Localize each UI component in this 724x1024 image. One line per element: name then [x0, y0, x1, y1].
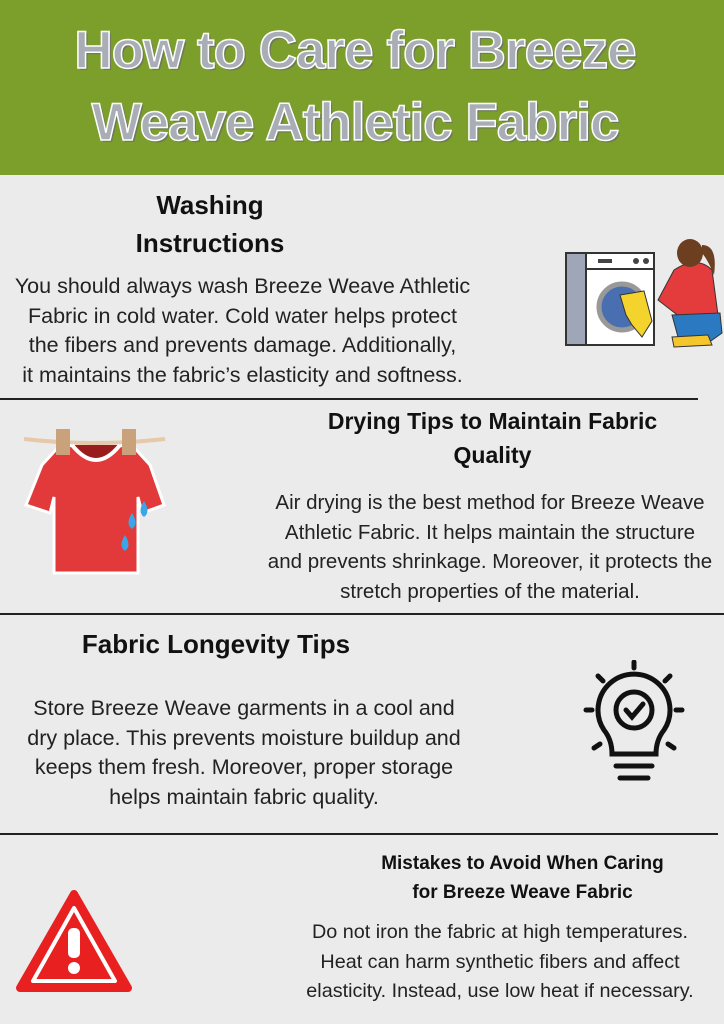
icon: shirt on clothesline — [24, 429, 166, 574]
title: Weave Athletic Fabric — [92, 93, 618, 152]
text: longevity — [27, 696, 461, 808]
icon: warning triangle — [16, 890, 132, 992]
heading: mistakes: for Breeze Weave Fabric — [412, 882, 633, 903]
text: washing: the fibers and prevents damage. Additionally, — [29, 333, 456, 357]
text: mistakes: Heat can harm synthetic fibers and affect — [320, 950, 680, 972]
heading: longevity: Fabric Longevity Tips — [82, 629, 350, 659]
text: washing: Fabric in cold water. Cold water helps protect — [28, 304, 457, 328]
text: washing: You should always wash Breeze Weave Athletic — [15, 274, 470, 298]
text: drying: and prevents shrinkage. Moreover, it protects the — [268, 550, 712, 573]
heading: mistakes — [381, 853, 664, 903]
text: longevity: keeps them fresh. Moreover, proper storage — [35, 755, 453, 779]
text: washing: it maintains the fabric’s elasticity and softness. — [22, 362, 463, 386]
title: How to Care for Breeze — [74, 21, 636, 80]
text: drying — [268, 491, 712, 602]
text: washing — [15, 274, 470, 386]
heading: drying: Quality — [454, 442, 531, 468]
icon: washing machine with woman — [565, 239, 722, 348]
heading: drying — [328, 408, 657, 468]
heading: washing: Washing — [156, 190, 264, 220]
text: drying: stretch properties of the material. — [340, 580, 640, 602]
heading: mistakes: Mistakes to Avoid When Caring — [381, 853, 664, 874]
heading: washing — [136, 190, 284, 258]
heading: washing: Instructions — [136, 228, 284, 258]
text: drying: Athletic Fabric. It helps maintain the structure — [285, 520, 695, 544]
text: mistakes: Do not iron the fabric at high temperatures. — [312, 921, 688, 943]
text: longevity: Store Breeze Weave garments in a cool and — [33, 696, 455, 720]
text: mistakes: elasticity. Instead, use low heat if necessary. — [306, 980, 694, 1002]
header banner — [0, 0, 724, 175]
text: mistakes — [306, 921, 694, 1002]
title — [74, 21, 637, 152]
text: longevity: helps maintain fabric quality. — [109, 784, 379, 808]
heading: drying: Drying Tips to Maintain Fabric — [328, 408, 657, 434]
text: longevity: dry place. This prevents moisture buildup and — [27, 726, 461, 750]
icon: lightbulb with check — [584, 660, 684, 780]
text: drying: Air drying is the best method for Breeze Weave — [275, 491, 705, 514]
